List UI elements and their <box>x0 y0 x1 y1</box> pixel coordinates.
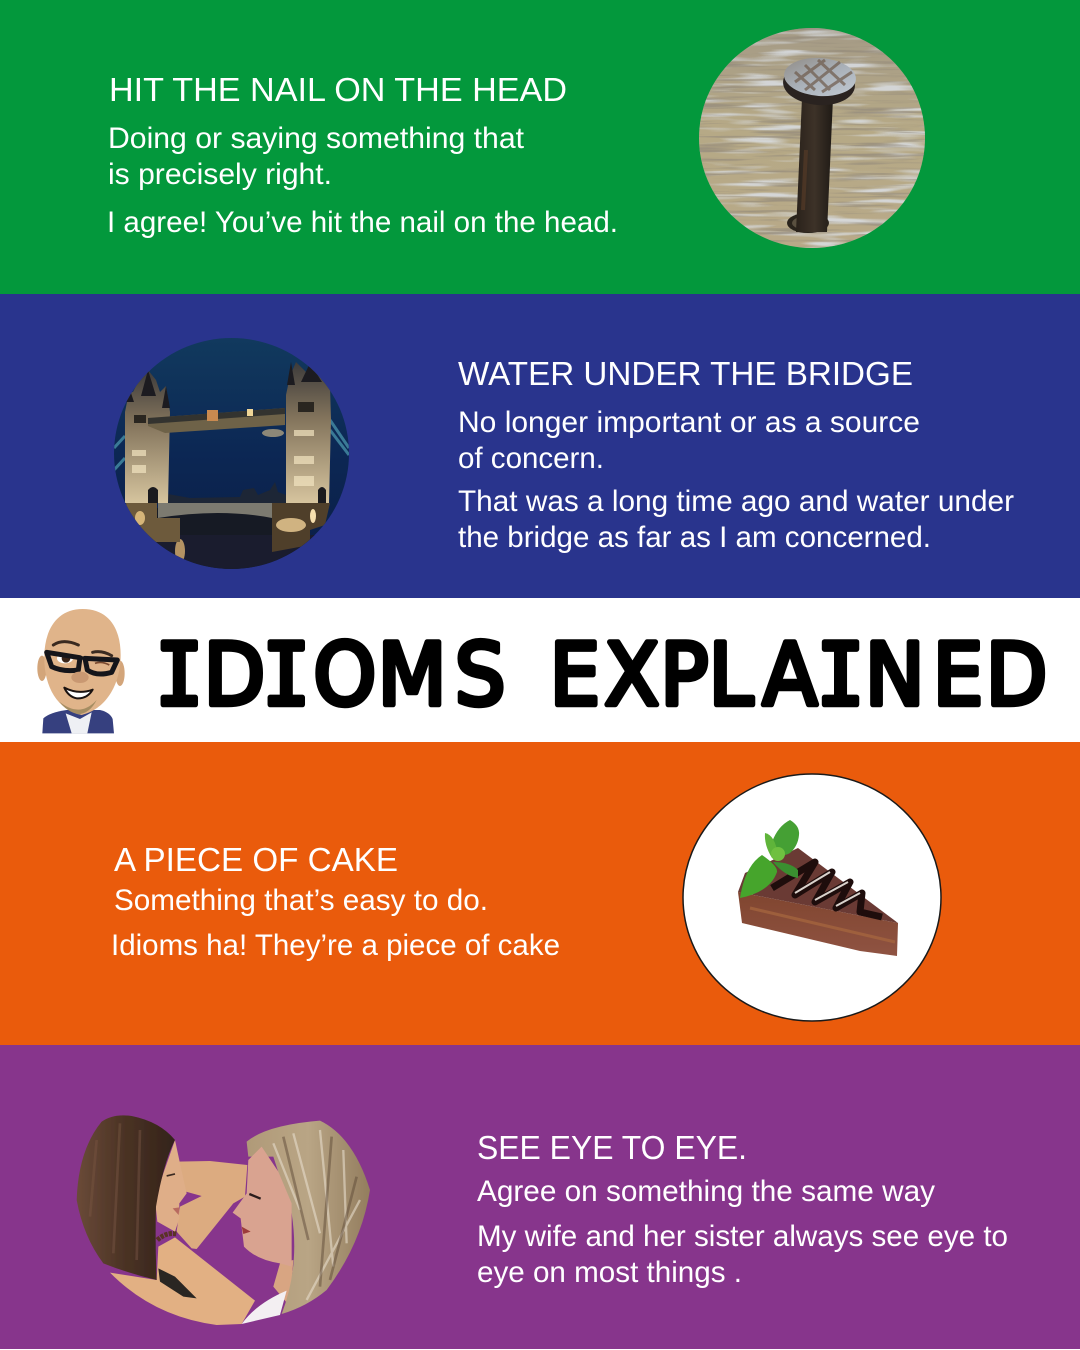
title: I <box>817 625 865 725</box>
water <box>148 535 314 569</box>
smile <box>64 688 93 698</box>
definition: hit the nail <box>108 122 525 191</box>
example: see eye to eye <box>477 1220 1008 1289</box>
panel: a piece of cake <box>0 742 1080 1045</box>
panel: water under the bridge <box>0 294 1080 598</box>
example: hit the nail: I agree! You’ve hit the nail on the head. <box>107 206 618 239</box>
lower arm and shoulder <box>110 1237 255 1325</box>
title: NED <box>865 625 1047 725</box>
cables <box>114 420 349 470</box>
right woman's neck and top <box>273 1260 293 1307</box>
title: OMS <box>313 625 506 725</box>
right tower <box>286 362 331 503</box>
heading: water under the bridge: WATER UNDER THE BRIDGE <box>458 355 913 392</box>
photo: tower bridge at night <box>110 335 355 575</box>
photo: nail in wood <box>695 25 930 251</box>
example: see eye to eye: eye on most things . <box>477 1256 742 1289</box>
definition: water under the bridge: of concern. <box>458 442 604 475</box>
example: a piece of cake: Idioms ha! They’re a piece of cake <box>111 929 560 962</box>
photo: chocolate cake slice <box>683 774 941 1021</box>
cake side <box>738 892 898 956</box>
title: D <box>204 625 265 725</box>
left tower <box>125 370 170 503</box>
bracelet <box>157 1233 177 1240</box>
tower windows and arches <box>148 487 326 503</box>
skyline <box>168 482 286 505</box>
example: see eye to eye: My wife and her sister always see eye to <box>477 1220 1008 1253</box>
mint leaves <box>740 855 777 898</box>
definition: a piece of cake: Something that’s easy to do. <box>114 884 488 917</box>
definition: hit the nail: is precisely right. <box>108 158 332 191</box>
left woman's face <box>155 1140 187 1232</box>
definition: see eye to eye: Agree on something the same way <box>477 1175 935 1208</box>
eyebrows <box>53 642 78 645</box>
high walkway <box>148 408 285 433</box>
heading: hit the nail on the head: HIT THE NAIL ON THE HEAD <box>109 71 567 108</box>
right woman's face <box>233 1147 292 1267</box>
wink <box>95 662 109 665</box>
jacket <box>42 710 114 733</box>
heading: a piece of cake: A PIECE OF CAKE <box>114 841 398 878</box>
right woman's hair <box>247 1121 370 1314</box>
definition: water under the bridge <box>458 406 920 475</box>
glasses <box>47 652 117 674</box>
nose <box>71 672 89 683</box>
title: I <box>262 625 310 725</box>
chocolate drizzle <box>772 862 882 917</box>
example: water under the bridge <box>458 485 1014 554</box>
panel: see eye to eye <box>0 1045 1080 1350</box>
ears <box>37 656 47 681</box>
left woman's hair <box>77 1115 175 1280</box>
open eye <box>57 653 73 663</box>
example: water under the bridge: the bridge as far as I am concerned. <box>458 521 931 554</box>
piers <box>126 503 180 542</box>
example: water under the bridge: That was a long time ago and water under <box>458 485 1014 518</box>
definition: hit the nail: Doing or saying something that <box>108 122 525 155</box>
title: I <box>155 625 203 725</box>
cake top <box>738 848 898 923</box>
band: title strip <box>0 598 1080 744</box>
heading: see eye to eye: SEE EYE TO EYE. <box>477 1129 747 1166</box>
title: EXPLA <box>550 625 817 725</box>
icon: winking avatar <box>37 609 125 733</box>
panel: hit the nail on the head <box>0 0 1080 294</box>
raised arm <box>177 1161 247 1249</box>
photo: two women face to face <box>77 1115 370 1325</box>
head <box>44 609 121 715</box>
lower bridge <box>157 508 272 535</box>
definition: water under the bridge: No longer important or as a source <box>458 406 920 439</box>
